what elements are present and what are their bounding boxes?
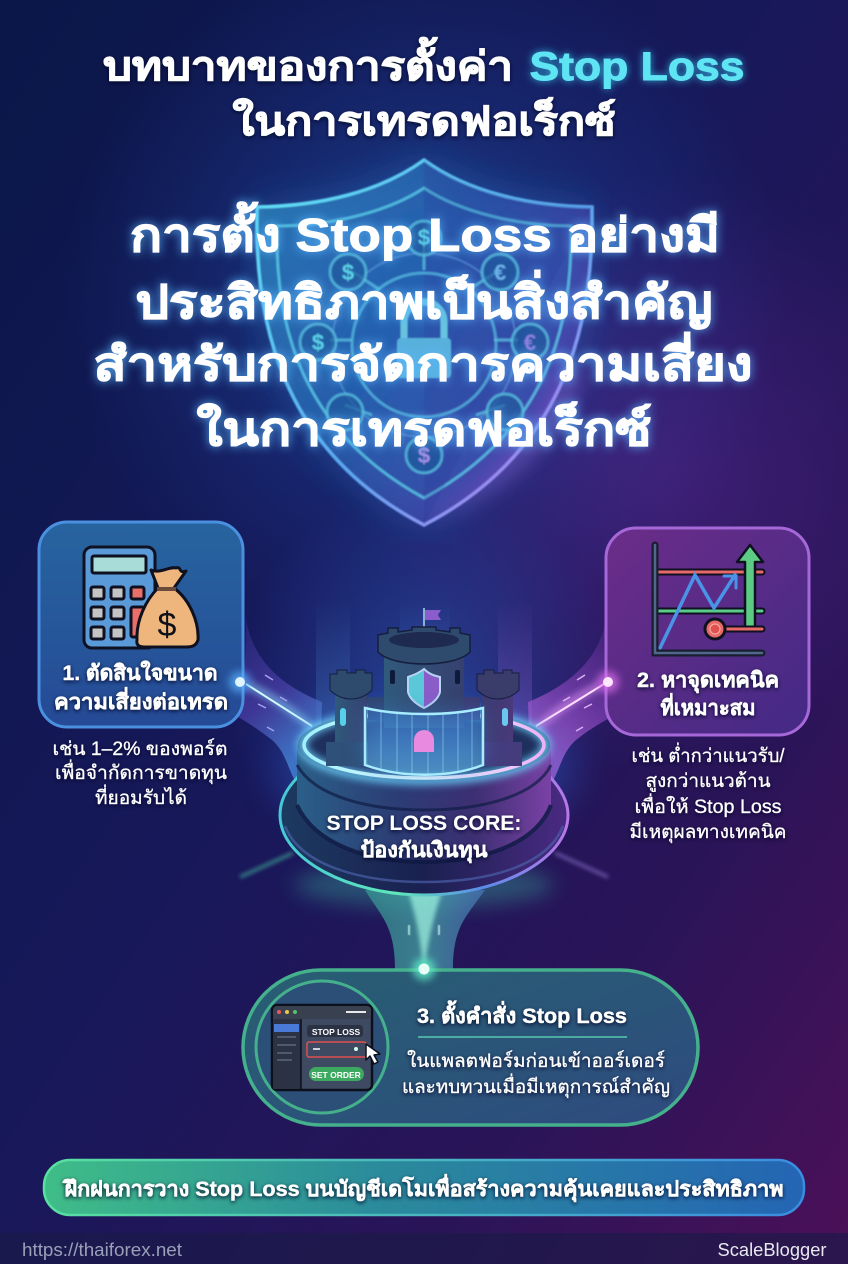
footer: https://thaiforex.net bbox=[22, 1240, 182, 1260]
panel: practice banner: ฝึกฝนการวาง Stop Loss บนบัญชีเดโมเพื่อสร้างความคุ้นเคยและประสิทธิภาพ bbox=[61, 1173, 783, 1203]
panel: step 2 bbox=[606, 528, 809, 735]
icon: money bag: $ bbox=[158, 606, 177, 644]
heading: main statement: สำหรับการจัดการความเสี่ยง bbox=[94, 332, 752, 390]
node: bottom bbox=[413, 958, 435, 980]
heading: 1. ตัดสินใจขนาด bbox=[62, 660, 218, 685]
text block: core label bbox=[326, 812, 522, 864]
panel: step 1 bbox=[39, 522, 243, 727]
icon: calculator bbox=[84, 547, 155, 648]
text block: core label: ป้องกันเงินทุน bbox=[360, 838, 488, 864]
text block: step 1 description bbox=[52, 738, 228, 809]
icon: platform window bbox=[256, 981, 388, 1113]
connector: funnel to step 3 bbox=[365, 890, 485, 969]
text block: step 2 description: สูงกว่าแนวต้าน bbox=[646, 771, 771, 792]
icon: platform window: SET ORDER bbox=[311, 1070, 361, 1080]
glass gate bbox=[365, 708, 483, 775]
icon: shield with currency network: € bbox=[494, 260, 506, 285]
text block: step 1 description: ที่ยอมรับได้ bbox=[95, 784, 187, 809]
heading: main statement: ในการเทรดฟอเร็กซ์ bbox=[196, 401, 652, 455]
text block: step 3 description: และทบทวนเมื่อมีเหตุการณ์สำคัญ bbox=[402, 1073, 670, 1099]
icon: technical chart bbox=[655, 545, 763, 653]
icon: castle core platform bbox=[274, 608, 574, 895]
heading: 3. ตั้งคำสั่ง Stop Loss bbox=[417, 1000, 627, 1028]
heading: main statement: การตั้ง Stop Loss อย่างมี bbox=[130, 201, 720, 261]
icon: shield with currency network: $ bbox=[418, 443, 430, 468]
text block: step 3 description bbox=[402, 1050, 670, 1099]
text block: step 2 description: เช่น ต่ำกว่าแนวรับ/ bbox=[632, 742, 785, 767]
footer: ScaleBlogger bbox=[718, 1240, 826, 1260]
heading: main statement: ประสิทธิภาพเป็นสิ่งสำคัญ bbox=[136, 270, 712, 329]
icon: shield with currency network: € bbox=[524, 330, 536, 355]
right tower bbox=[477, 670, 522, 766]
title bbox=[103, 37, 744, 144]
connector: base streaks bbox=[240, 853, 608, 907]
panel: practice banner bbox=[44, 1160, 804, 1215]
title: Stop Loss bbox=[530, 45, 744, 89]
node: right bbox=[597, 671, 619, 693]
text block: step 2 description: เพื่อให้ Stop Loss bbox=[634, 793, 782, 818]
text block: step 2 description: มีเหตุผลทางเทคนิค bbox=[630, 821, 786, 844]
heading: main statement bbox=[94, 201, 752, 455]
heading: ที่เหมาะสม bbox=[660, 692, 756, 720]
heading: ความเสี่ยงต่อเทรด bbox=[54, 686, 228, 714]
connector: right flow bbox=[528, 620, 612, 782]
connector: left flow bbox=[238, 620, 322, 782]
footer bbox=[0, 1233, 848, 1264]
panel: step 3 bbox=[243, 970, 698, 1125]
heading: 2. หาจุดเทคนิค bbox=[637, 669, 779, 694]
icon: shield with currency network bbox=[257, 160, 592, 525]
lower base bbox=[280, 777, 568, 895]
upper drum bbox=[297, 745, 551, 862]
text block: step 1 description: เช่น 1–2% ของพอร์ต bbox=[52, 738, 228, 760]
heading bbox=[54, 660, 228, 714]
title: บทบาทของการตั้งค่า bbox=[103, 37, 513, 89]
icon: shield with currency network: $ bbox=[312, 330, 324, 355]
text block: step 2 description bbox=[630, 742, 786, 844]
left tower bbox=[326, 670, 372, 766]
icon: money bag bbox=[137, 568, 198, 647]
emblem shield bbox=[408, 669, 440, 708]
text block: step 3 description: ในแพลตฟอร์มก่อนเข้าออร์เดอร์ bbox=[407, 1050, 665, 1072]
light columns behind castle bbox=[316, 590, 532, 740]
icon: shield with currency network: $ bbox=[418, 225, 430, 250]
title: ในการเทรดฟอเร็กซ์ bbox=[232, 96, 616, 144]
node: left bbox=[229, 671, 251, 693]
icon: shield with currency network: $ bbox=[342, 260, 354, 285]
icon: platform window: STOP LOSS bbox=[312, 1027, 360, 1037]
heading bbox=[637, 669, 779, 720]
text block: step 1 description: เพื่อจำกัดการขาดทุน bbox=[55, 759, 227, 785]
text block: core label: STOP LOSS CORE: bbox=[326, 812, 522, 835]
main tower bbox=[368, 608, 480, 728]
